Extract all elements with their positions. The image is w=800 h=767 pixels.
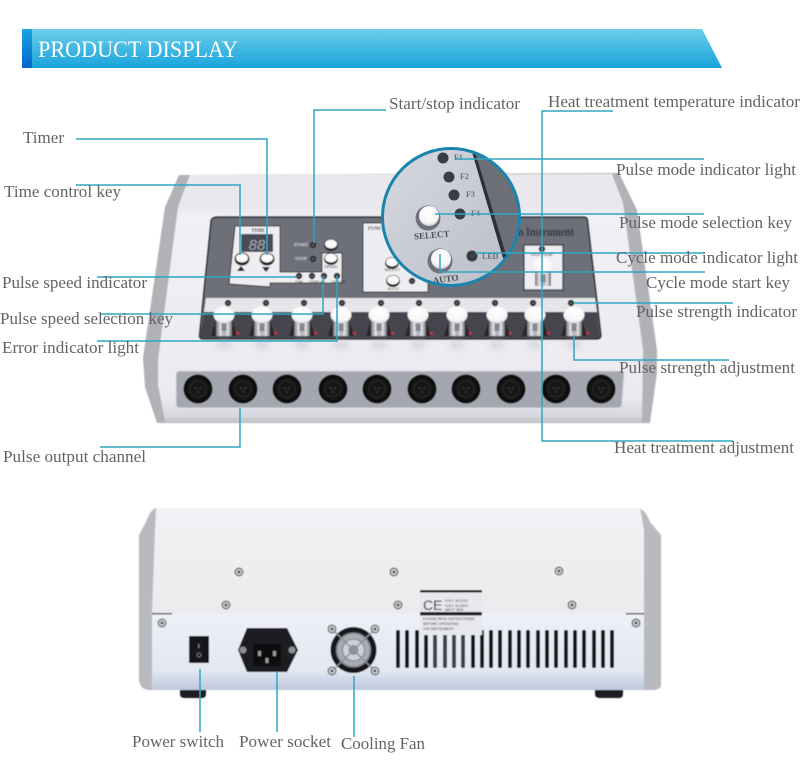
labels: front panel: Time control key [4, 182, 121, 201]
start stop and speed controls [294, 239, 346, 284]
rating label: PLEASE READ INSTRUCTIONS [423, 617, 475, 621]
knob reflections [216, 340, 582, 350]
start stop and speed controls: START [294, 242, 308, 247]
labels: front panel: Pulse mode indicator light [616, 160, 796, 179]
magnifier callout [382, 145, 530, 290]
labels: front panel: Error indicator light [2, 338, 139, 357]
ventilation slots [396, 630, 614, 668]
function labels: F2 [460, 172, 469, 181]
labels: front panel: Cycle mode start key [646, 273, 790, 292]
start stop and speed controls: DIM [295, 279, 303, 284]
pulse strength knobs [211, 306, 589, 336]
screws [158, 566, 640, 628]
rating label: BEFORE OPERATING [423, 622, 459, 626]
function labels: F3 [466, 190, 475, 199]
labels: front panel: Start/stop indicator [389, 94, 520, 113]
front device photo [143, 173, 657, 423]
rating label: VOLT: AC220V [445, 604, 469, 608]
device body [143, 173, 657, 423]
select button: SELECT [414, 228, 450, 242]
control panel [199, 217, 601, 339]
cooling fan [328, 624, 380, 676]
heat treatment block: HEAT TEMP [531, 252, 554, 257]
labels: front panel [0, 92, 800, 466]
labels: rear panel [132, 732, 425, 753]
labels: rear panel: Power switch [132, 732, 224, 751]
rating label: CE [423, 597, 442, 613]
rating label: THE INSTRUMENT [423, 627, 455, 631]
labels: rear panel: Power socket [239, 732, 331, 751]
labels: front panel: Pulse speed selection key [0, 309, 173, 328]
instrument name: n Instrument [518, 224, 575, 239]
heat treatment block [524, 245, 563, 290]
rear leader lines [200, 669, 354, 737]
heading: PRODUCT DISPLAY [38, 37, 238, 62]
auto button: AUTO [432, 272, 459, 286]
timer control block [229, 226, 342, 287]
rating label: WATT: 40W [445, 608, 464, 612]
leader lines [76, 110, 733, 447]
function labels: F1 [454, 153, 463, 162]
start stop and speed controls: ERROR [332, 279, 346, 284]
function block: AUTO [387, 286, 399, 291]
function labels: F4 [471, 209, 480, 218]
power switch [189, 636, 209, 663]
function block [363, 223, 428, 292]
rear body [139, 508, 661, 690]
labels: front panel: Pulse strength adjustment [619, 358, 795, 377]
labels: front panel: Pulse strength indicator [636, 302, 797, 321]
rubber feet [180, 688, 623, 698]
labels: front panel: Heat treatment adjustment [614, 438, 794, 457]
function block: SELECT [384, 267, 400, 272]
rating label [420, 590, 482, 635]
power socket [238, 628, 298, 672]
rating label: VOLT: AC110V [445, 599, 469, 603]
timer control block: TIME [251, 229, 265, 234]
function labels [454, 153, 499, 261]
rear device photo [139, 508, 661, 698]
timer control block: 88 [249, 237, 266, 254]
start stop and speed controls: SPEED [324, 264, 338, 269]
select button [414, 206, 450, 242]
function labels: LED [482, 252, 499, 261]
labels: front panel: Pulse mode selection key [619, 213, 792, 232]
labels: front panel: Pulse speed indicator [2, 273, 147, 292]
labels: front panel: Timer [23, 128, 64, 147]
labels: front panel: Pulse output channel [3, 447, 146, 466]
pulse strength indicators [225, 300, 574, 306]
start stop and speed controls: STOP [295, 256, 307, 261]
output socket strip [176, 371, 624, 408]
labels: front panel: Cycle mode indicator light [616, 248, 798, 267]
function block: FUNCTION [368, 227, 395, 232]
header banner [22, 29, 722, 68]
auto button [428, 248, 458, 283]
start stop and speed controls: DISPLAY [309, 279, 326, 284]
function indicator lights [438, 152, 478, 262]
labels: rear panel: Cooling Fan [341, 734, 425, 753]
labels: front panel: Heat treatment temperature indicator [548, 92, 800, 111]
